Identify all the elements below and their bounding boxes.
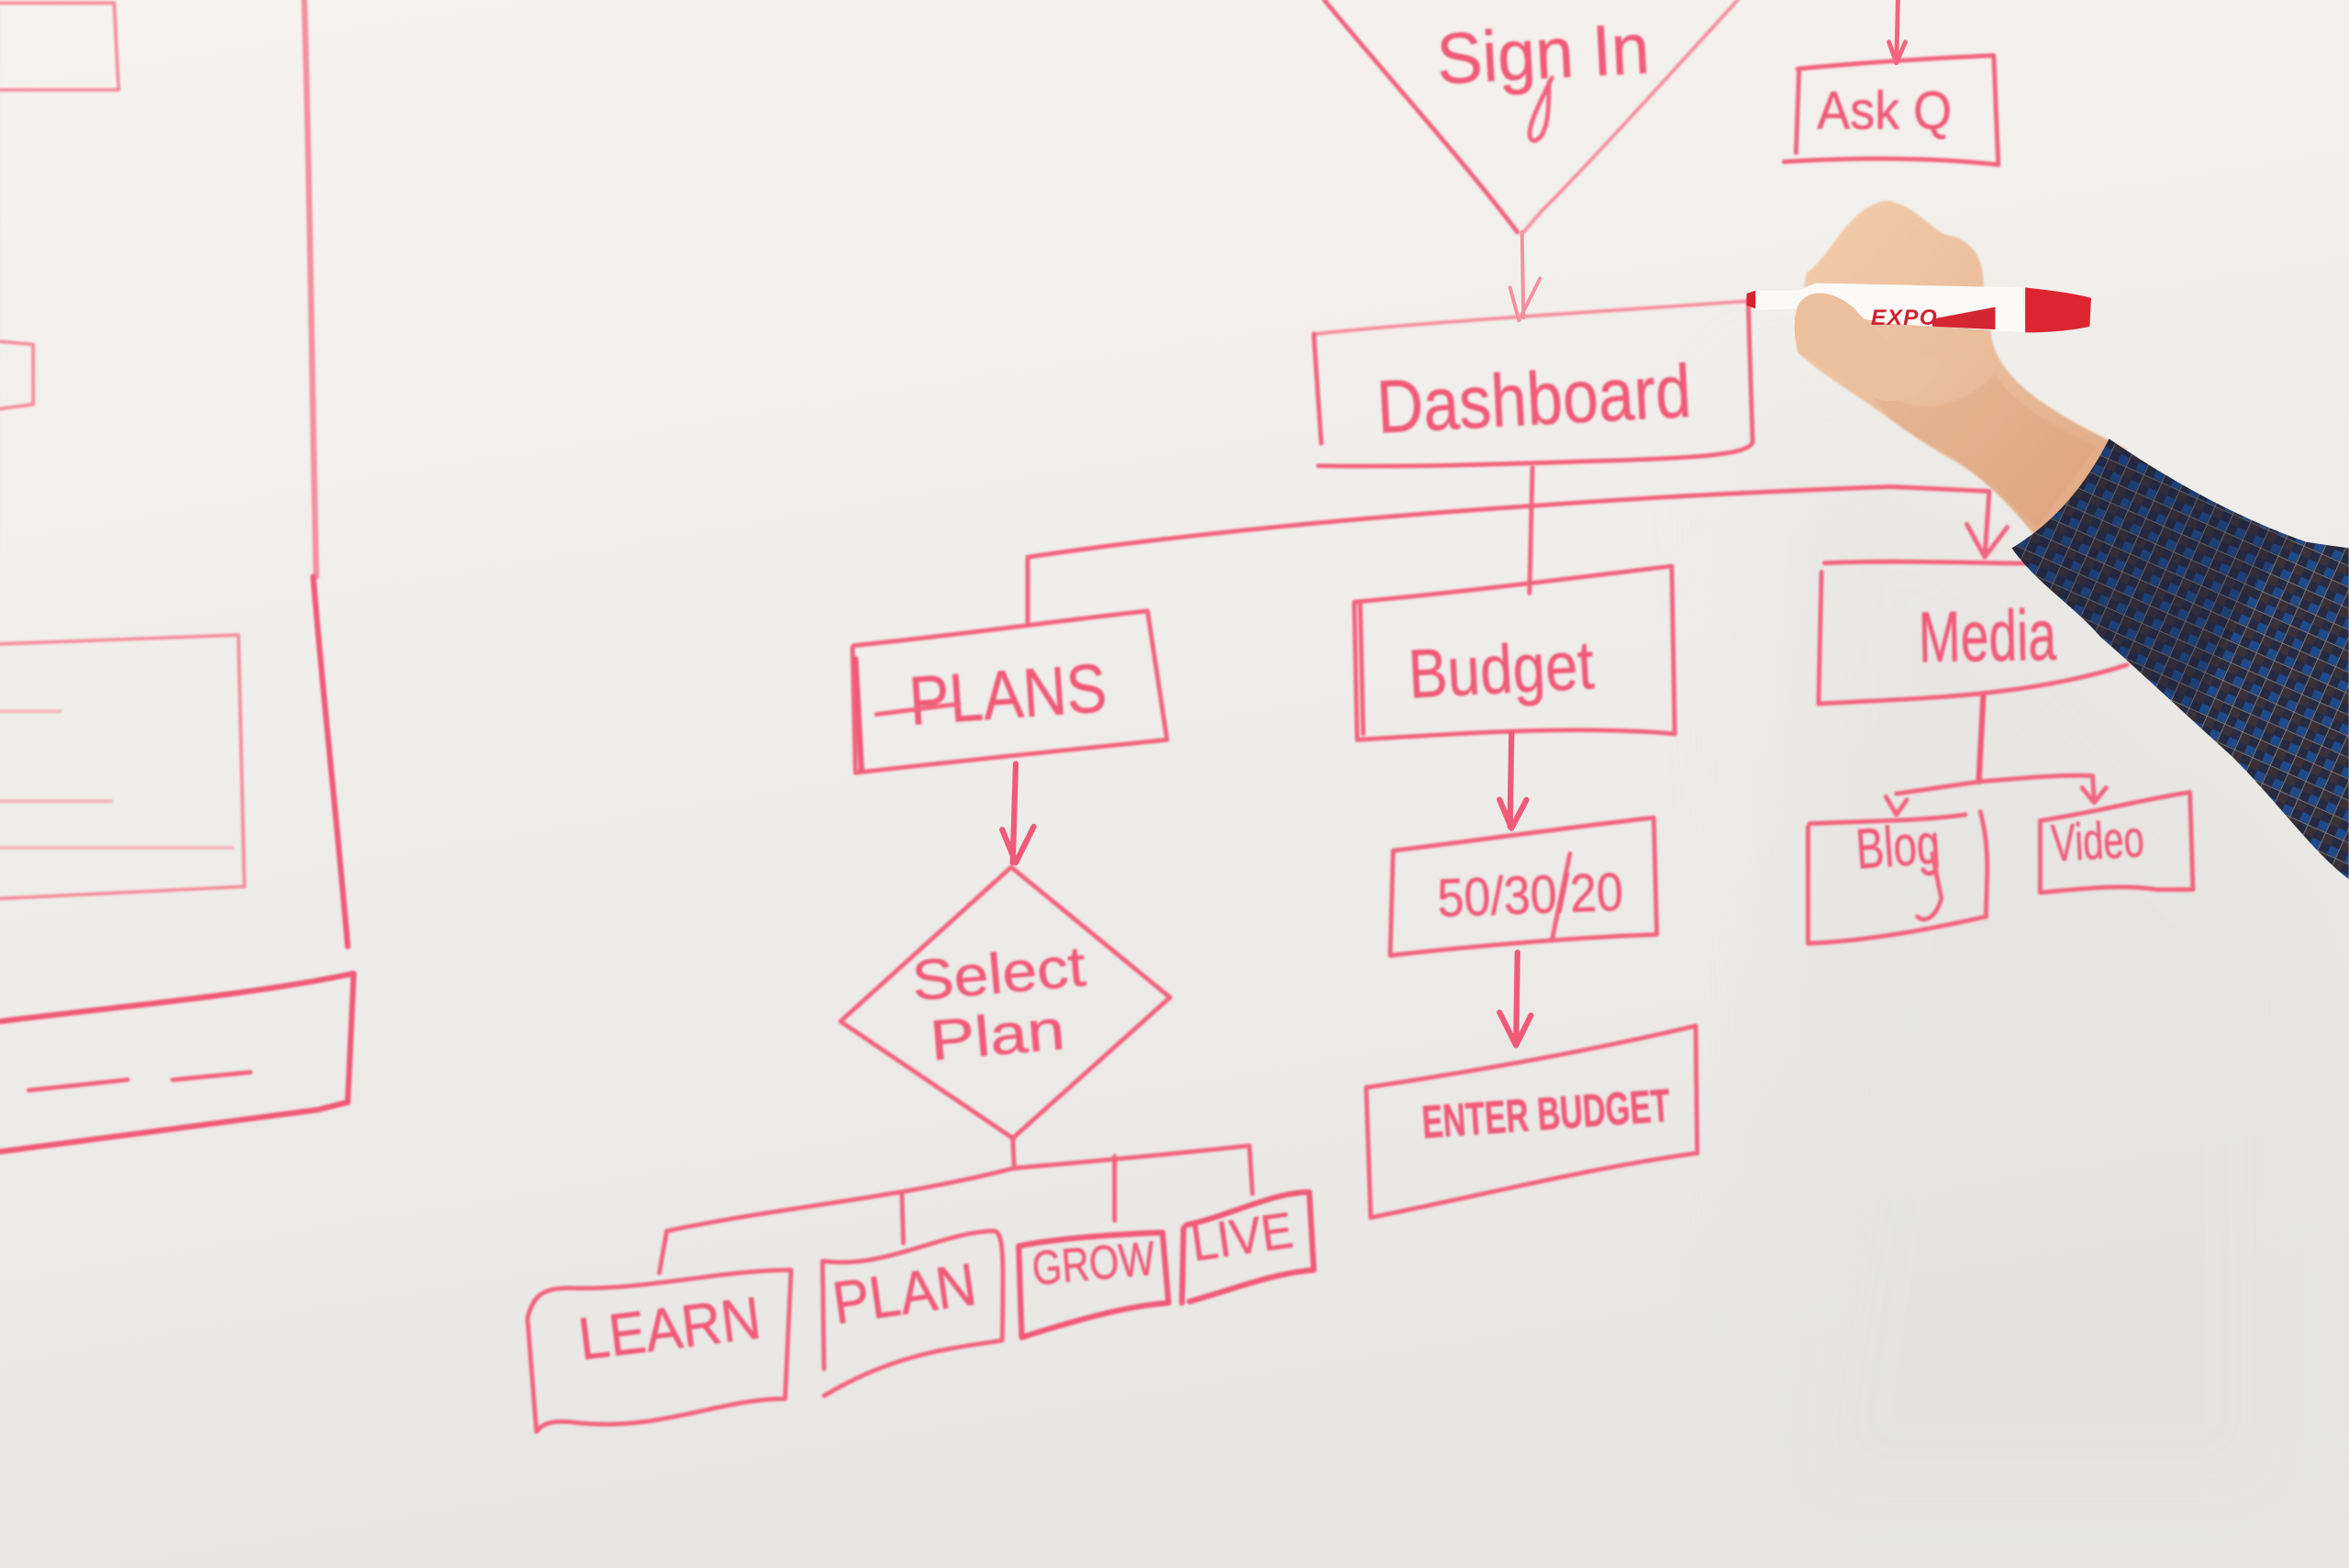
hand holding marker: [1797, 201, 2127, 557]
learn box: [528, 1270, 791, 1431]
connector tree to four boxes: [659, 1139, 1252, 1273]
blog box: [1808, 812, 1987, 943]
select plan diamond: [841, 867, 1170, 1139]
budget label: Budget: [1407, 626, 1596, 713]
dashboard box: [1314, 299, 1753, 466]
plan label: PLAN: [829, 1251, 980, 1337]
learn label: LEARN: [574, 1284, 764, 1373]
connectors from dashboard to three branches: [1028, 467, 2008, 623]
grow label: GROW: [1030, 1232, 1158, 1296]
dashboard label: Dashboard: [1375, 350, 1693, 450]
ask q box: [1784, 55, 1998, 165]
video box: [2040, 792, 2193, 893]
arrow 50/30/20 to enter budget: [1499, 952, 1531, 1045]
grow box: [1019, 1232, 1168, 1338]
hand: [1797, 201, 2127, 557]
video label: Video: [2050, 809, 2145, 873]
marker pen: [1747, 284, 2091, 401]
connectors media to blog and video: [1886, 696, 2106, 815]
thumb on marker: [1795, 293, 1942, 401]
enter budget label: ENTER BUDGET: [1420, 1079, 1672, 1149]
thumb crease shading: [1865, 374, 2097, 528]
plaid shirt sleeve: [2011, 439, 2349, 879]
50/30/20 label: 50/30/20: [1436, 862, 1624, 929]
50/30/20 box: [1390, 817, 1657, 955]
enter budget box: [1366, 1026, 1698, 1218]
ask q label: Ask Q: [1817, 81, 1952, 140]
marker brand label: EXPO: [1871, 306, 1937, 330]
blog label: Blog: [1854, 812, 1942, 882]
plans label: PLANS: [907, 649, 1109, 740]
media label: Media: [1918, 595, 2057, 677]
plans box: [852, 611, 1167, 773]
plan box: [822, 1231, 1003, 1396]
select plan label: Select: [909, 935, 1088, 1013]
whiteboard shadow of the arm: [1722, 374, 2349, 1568]
left partial wireframe drawing: [0, 0, 354, 1151]
select plan label: Plan: [928, 998, 1067, 1073]
budget box: [1354, 566, 1675, 740]
arrow into ask q: [1889, 0, 1906, 63]
sign in funnel: [1324, 0, 1738, 232]
media box: [1819, 562, 2127, 704]
arrow plans to select plan: [1002, 763, 1034, 862]
live label: LIVE: [1187, 1201, 1297, 1272]
sign in label: Sign In: [1435, 7, 1652, 99]
arrow budget to 50/30/20: [1499, 734, 1527, 828]
select plan label: [909, 935, 1088, 1073]
live box: [1182, 1192, 1314, 1303]
arrow funnel to dashboard: [1510, 232, 1540, 320]
